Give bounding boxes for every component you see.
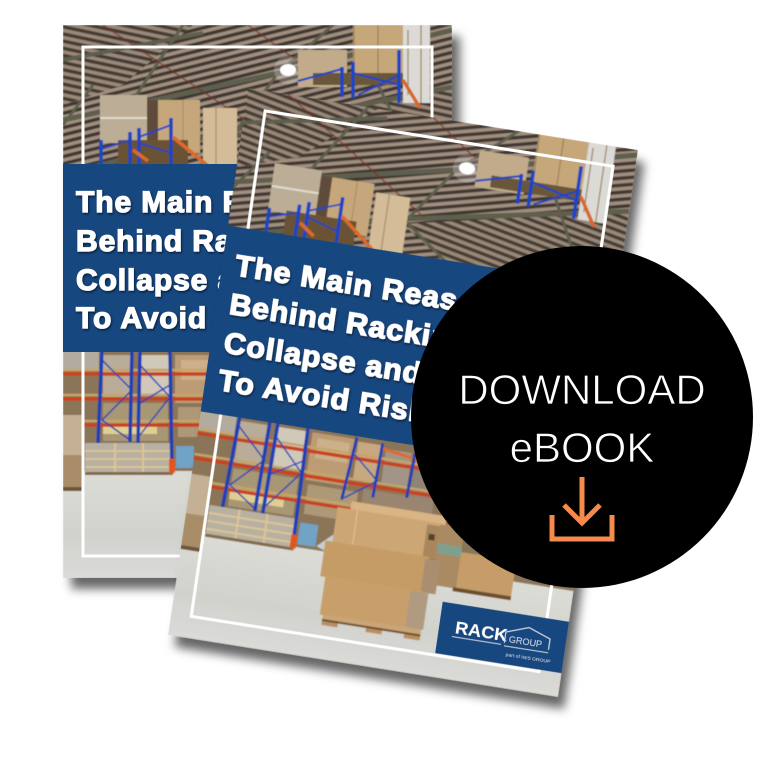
cover title: The Main Reasons [233, 249, 516, 326]
cover title: Behind Racking [76, 225, 315, 258]
cover title: The Main Reasons [76, 186, 354, 219]
cover title: Behind Racking [227, 288, 472, 359]
Rack Group logo block [435, 602, 569, 673]
icon: download arrow [552, 477, 612, 539]
logo divider and tagline [452, 637, 548, 653]
download label: DOWNLOAD [458, 366, 706, 413]
white frame [191, 111, 613, 672]
download badge [411, 246, 753, 588]
white frame [83, 47, 432, 556]
logo group text: GROUP [508, 635, 543, 650]
cover title: To Avoid Risk [76, 302, 283, 335]
logo house outline [504, 624, 551, 650]
cover photo: warehouse racking [63, 25, 452, 578]
front ebook cover [168, 88, 638, 697]
cover photo: warehouse racking and boxes [168, 88, 638, 697]
logo sub-brand: part of IWS GROUP [505, 652, 551, 665]
download label: eBOOK [510, 424, 654, 471]
cover title: To Avoid Risk [216, 364, 429, 430]
back ebook cover [63, 25, 452, 578]
cover title: Collapse and How [222, 327, 500, 403]
logo wordmark: RACK [454, 617, 509, 645]
cover title: Collapse and How [76, 264, 349, 297]
blue title band [201, 225, 529, 459]
blue title band [63, 164, 363, 352]
